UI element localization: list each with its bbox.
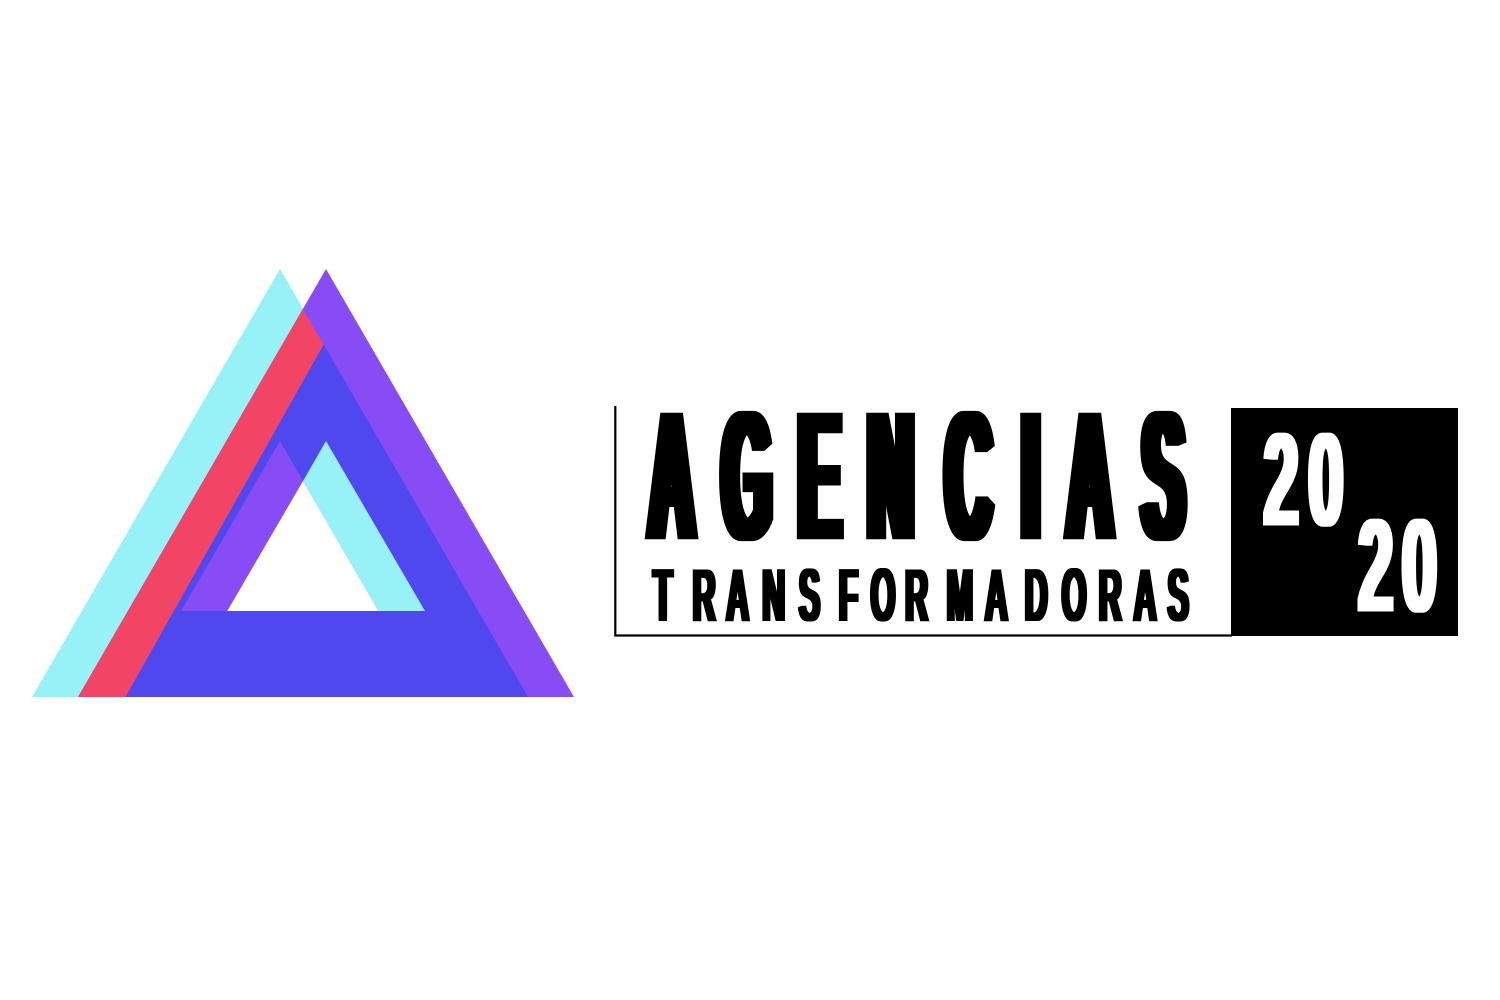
white centre triangle bbox=[227, 481, 378, 611]
subtitle: TRANSFORMADORAS: TRANSFORMADORAS bbox=[653, 555, 1189, 638]
year: 20 bottom: 20 bbox=[1358, 492, 1437, 641]
blue overlap bbox=[126, 344, 528, 697]
title frame lines bbox=[615, 406, 1232, 636]
purple inner triangle bbox=[181, 441, 303, 611]
title: AGENCIAS: AGENCIAS bbox=[649, 375, 1184, 579]
logo: overlapping triangles bbox=[32, 269, 574, 697]
year block bbox=[1231, 408, 1458, 636]
cyan outer triangle bbox=[32, 269, 528, 697]
red overlap strip bbox=[78, 309, 324, 697]
purple outer triangle bbox=[78, 269, 574, 697]
year: 20 top: 20 bbox=[1264, 406, 1343, 555]
cyan inner triangle bbox=[303, 441, 425, 611]
